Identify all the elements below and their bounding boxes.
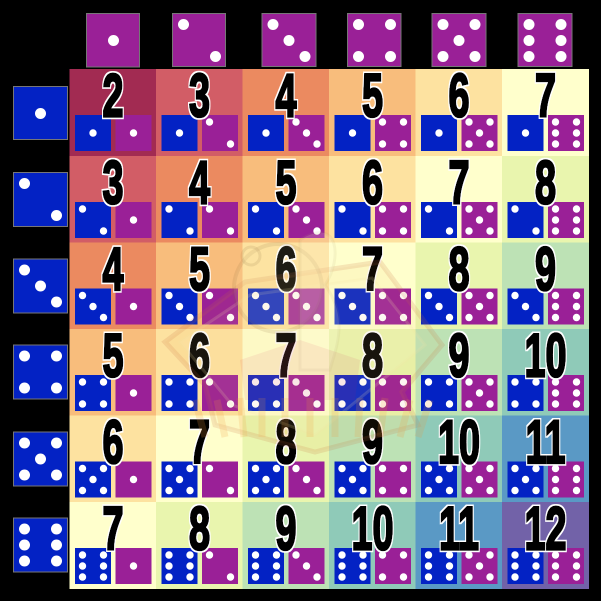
cell: 2+5=7: 7 xyxy=(448,148,470,217)
cell: 3+3=6 xyxy=(242,235,329,329)
grid of sums xyxy=(70,61,589,589)
cell: 4+6=10 xyxy=(502,321,589,416)
cell: 4+2=6 xyxy=(156,321,242,416)
cell: 5+1=6: 6 xyxy=(102,408,124,476)
cell: 6+1=7 xyxy=(70,494,156,589)
cell: 1+3=4: 4 xyxy=(275,61,297,130)
cell: 1+4=5 xyxy=(329,61,416,156)
cell: 6+3=9 xyxy=(242,494,329,589)
watermark: mascot logo xyxy=(165,233,442,452)
cell: 3+3=6: 6 xyxy=(275,235,297,303)
cell: 4+3=7: 7 xyxy=(275,321,297,390)
cell: 5+4=9: 9 xyxy=(362,408,383,476)
cell: 4+5=9 xyxy=(416,321,502,416)
cell: 5+2=7 xyxy=(156,408,242,502)
cell: 4+5=9: 9 xyxy=(448,321,470,390)
cell: 6+6=12: 12 xyxy=(524,494,567,563)
cell: 2+6=8: 8 xyxy=(535,148,556,217)
cell: 5+3=8: 8 xyxy=(275,408,297,476)
cell: 3+4=7: 7 xyxy=(362,235,383,303)
cell: 6+4=10 xyxy=(329,494,416,589)
cell: 3+1=4 xyxy=(70,235,156,329)
cell: 5+3=8 xyxy=(242,408,329,502)
cell: 1+2=3 xyxy=(156,61,242,156)
cell: 4+3=7 xyxy=(242,321,329,416)
cell: 5+5=10 xyxy=(416,408,502,502)
cell: 1+1=2: 2 xyxy=(102,61,124,130)
cell: 5+6=11 xyxy=(502,408,589,502)
blue die 5 xyxy=(14,432,68,486)
cell: 2+5=7 xyxy=(416,148,502,242)
cell: 1+5=6 xyxy=(416,61,502,156)
cell: 4+1=5: 5 xyxy=(102,321,124,390)
header row: purple dice xyxy=(86,14,572,67)
cell: 3+5=8: 8 xyxy=(448,235,470,303)
cell: 6+5=11: 11 xyxy=(439,494,479,563)
blue die 1 xyxy=(14,86,68,140)
cell: 6+2=8: 8 xyxy=(189,494,210,563)
cell: 6+5=11 xyxy=(416,494,502,589)
cell: 4+2=6: 6 xyxy=(189,321,210,390)
cell: 1+4=5: 5 xyxy=(362,61,383,130)
cell: 2+4=6: 6 xyxy=(362,148,383,217)
cell: 2+2=4 xyxy=(156,148,242,242)
cell: 6+1=7: 7 xyxy=(102,494,124,563)
cell: 3+2=5: 5 xyxy=(189,235,210,303)
cell: 3+6=9 xyxy=(502,235,589,329)
cell: 3+4=7 xyxy=(329,235,416,329)
cell: 4+6=10: 10 xyxy=(524,321,567,390)
left column: blue dice xyxy=(14,86,68,572)
cell: 1+6=7: 7 xyxy=(535,61,556,130)
cell: 2+2=4: 4 xyxy=(189,148,210,217)
cell: 6+3=9: 9 xyxy=(275,494,297,563)
cell: 1+6=7 xyxy=(502,61,589,156)
cell: 6+2=8 xyxy=(156,494,242,589)
cell: 6+4=10: 10 xyxy=(351,494,394,563)
cell: 1+1=2 xyxy=(70,61,156,156)
cell: 4+1=5 xyxy=(70,321,156,416)
cell: 3+5=8 xyxy=(416,235,502,329)
cell: 4+4=8 xyxy=(329,321,416,416)
purple die 4 xyxy=(348,14,401,66)
cell: 2+1=3: 3 xyxy=(102,148,124,217)
cell: 5+1=6 xyxy=(70,408,156,502)
cell: 3+6=9: 9 xyxy=(535,235,556,303)
cell: 1+2=3: 3 xyxy=(189,61,210,130)
cell: 5+6=11: 11 xyxy=(526,408,565,476)
cell: 3+2=5 xyxy=(156,235,242,329)
cell: 5+5=10: 10 xyxy=(438,408,480,476)
cell: 5+2=7: 7 xyxy=(189,408,210,476)
blue die 3 xyxy=(14,259,68,313)
purple die 5 xyxy=(432,14,486,66)
cell: 2+3=5 xyxy=(242,148,329,242)
blue die 6 xyxy=(14,518,68,572)
purple die 3 xyxy=(262,14,316,66)
cell: 1+5=6: 6 xyxy=(448,61,470,130)
purple die 6 xyxy=(518,14,572,66)
cell: 1+3=4 xyxy=(242,61,329,156)
cell: 4+4=8: 8 xyxy=(362,321,383,390)
cell: 6+6=12 xyxy=(502,494,589,589)
cell: 2+3=5: 5 xyxy=(275,148,297,217)
blue die 2 xyxy=(14,172,68,226)
purple die 2 xyxy=(172,14,226,66)
cell: 2+1=3 xyxy=(70,148,156,242)
cell: 2+4=6 xyxy=(329,148,416,242)
purple die 1 xyxy=(86,14,140,67)
cell: 3+1=4: 4 xyxy=(102,235,124,303)
cell: 5+4=9 xyxy=(329,408,416,502)
blue die 4 xyxy=(14,345,68,399)
cell: 2+6=8 xyxy=(502,148,589,242)
